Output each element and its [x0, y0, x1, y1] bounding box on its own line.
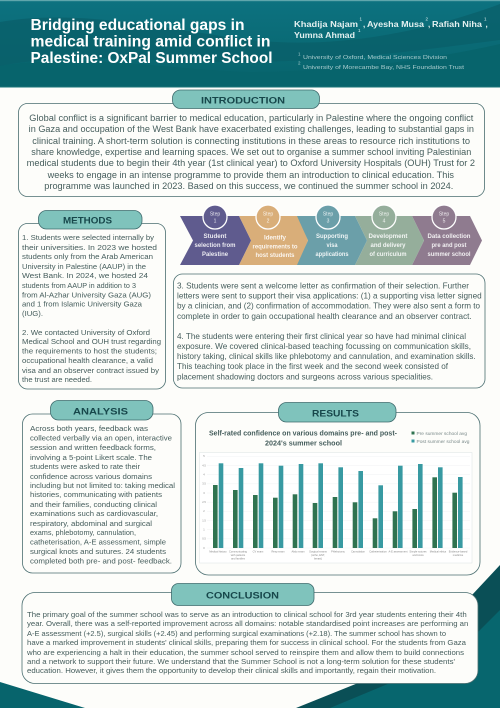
bar chart [200, 452, 472, 563]
authors: 2 [426, 16, 428, 22]
text: analysis body: histories, communicating with patients [30, 490, 162, 499]
affiliations [298, 52, 465, 71]
text: conclusion body: and a network to support their future. We understand that the Summer School is not a long-term solution for these students' [27, 657, 456, 666]
title: Bridging educational gaps in [30, 17, 244, 34]
text: conclusion body: have a marked improvement in students' clinical skills, preparing them for success in clinical school. For the students from Gaza [27, 638, 467, 647]
x axis labels: Abdo exam [291, 550, 305, 554]
step 5 [412, 205, 482, 265]
x axis labels: Simple sutures [409, 550, 427, 554]
x axis labels: Surgical exams [309, 550, 328, 554]
text: methods body: occupational health clearance, a valid [22, 356, 153, 365]
step 3: visa [326, 243, 338, 249]
authors: , [363, 20, 365, 29]
chart legend: Post summer school avg [416, 439, 470, 445]
step 4: and delivery [370, 243, 406, 249]
text: steps 3 and 4: letters were sent to support their visa applications: (1) a supporting visa letter signed [177, 292, 482, 301]
text: introduction body: share knowledge, expertise and learning spaces. We set out to organise a summer school inviting Palestinian [31, 147, 471, 157]
y axis labels: 5 [203, 454, 205, 458]
step 5: Step [439, 212, 449, 218]
text: conclusion body [26, 610, 468, 675]
x axis labels: Medical history [209, 550, 227, 554]
authors: 1 [358, 28, 361, 33]
authors: Yumna Ahmad [294, 31, 355, 40]
y axis labels: 3 [203, 491, 205, 495]
step 5: Data collection [428, 234, 471, 240]
panel: analysis [22, 400, 181, 573]
step 3 [296, 205, 367, 265]
affiliations: 1 [298, 52, 301, 56]
heading: introduction [172, 90, 320, 108]
y axis labels: 2.5 [202, 500, 206, 504]
text: steps 3 and 4: 4. The students were entering their first clinical year so have had minimal clinical [177, 332, 466, 341]
text: methods body: the trust are needed. [22, 375, 92, 384]
pre summer school bars [213, 477, 457, 548]
text: steps 3 and 4: 3. Students were sent a welcome letter as confirmation of their selection. Further [177, 282, 469, 291]
x axis labels: and knots [412, 553, 424, 557]
panel: methods continued [174, 274, 485, 388]
panel: methods [18, 210, 166, 389]
step 2: 2 [267, 218, 270, 224]
step 1 [180, 205, 251, 265]
x axis labels: Cannulation [351, 550, 365, 554]
text: methods body [22, 233, 161, 384]
text: analysis body: Across both years, feedback was [30, 424, 148, 433]
authors: , [428, 20, 430, 29]
text: methods body: University in Palestine (AAUP) in the [22, 262, 146, 271]
text: introduction body: programme was launched in 2023. Based on this success, we continued the summer school in 2024. [44, 181, 453, 191]
x axis labels [209, 550, 468, 560]
step 1: 1 [214, 218, 217, 224]
y axis labels: 3.5 [202, 482, 206, 486]
heading: results: RESULTS [312, 408, 359, 420]
text: steps 3 and 4: history taking, clinical skills like phlebotomy and cannulation, and examination skills. [177, 352, 476, 361]
authors: , [486, 20, 488, 29]
step 1: selection from [194, 243, 236, 249]
text: introduction body: Global conflict is a significant barrier to medical education, particularly in Palestine where the ongoing conflict [29, 113, 474, 123]
text: methods body: 1. Students were selected internally by [22, 233, 154, 242]
y axis labels: 0.5 [202, 537, 206, 541]
step 3: 3 [327, 218, 330, 224]
x axis labels: and families [231, 556, 246, 560]
affiliations: 2 [298, 60, 301, 66]
text: introduction body: weeks to engage in an intense programme to provide them an introduction to clinical education. This [47, 170, 454, 180]
text: analysis body: confidence across various domains [30, 472, 152, 481]
text: analysis body: completed both pre- and post- feedback. [30, 556, 172, 566]
text: introduction body: medical students due to begin their 4th year (1st clinical year) to Oxford University Hospitals (OUH) Trust for 2 [27, 158, 475, 168]
step 4: 4 [383, 218, 386, 224]
step 5: summer school [428, 252, 471, 258]
authors: 1 [360, 16, 362, 22]
y axis labels: 0 [203, 546, 205, 550]
x axis labels: Catheterisation [369, 550, 387, 554]
x axis labels: Resp exam [271, 550, 285, 554]
panel: results [196, 402, 480, 575]
text: steps 3 and 4: This teaching took place in the first week and the second week consisted of [177, 362, 449, 371]
text: methods body: and 1 from Islamic University Gaza [22, 300, 143, 308]
text: introduction body: clinical training. A short-term solution is connecting institutions in these areas to resource rich institutions to [32, 136, 470, 146]
text: analysis body: involving a 5-point Likert scale. The [30, 453, 152, 462]
heading: analysis [50, 400, 153, 420]
step 4 [355, 205, 424, 265]
authors [294, 16, 488, 40]
step 2 [239, 205, 308, 265]
x axis labels: CV exam [253, 550, 263, 554]
x axis labels: medicine [453, 553, 464, 557]
y axis labels: 1 [203, 528, 205, 532]
step 2: Step [263, 212, 273, 218]
y axis labels: 2 [203, 509, 205, 513]
panel: introduction [18, 90, 484, 196]
text: conclusion body: education. However, it gives them the opportunity to develop their clinical skills and importantly, regain their motivation. [27, 666, 436, 675]
x axis labels: Communicating [229, 550, 248, 554]
step 3: Supporting [316, 234, 348, 240]
text: methods body: Medical School and OUH trust regarding [22, 337, 161, 346]
text: methods body: the requirements to host the students; [22, 346, 157, 356]
chart title: 2024's summer school [265, 438, 342, 448]
affiliations: University of Morecambe Bay, NHS Foundation Trust [303, 65, 465, 71]
heading: results [278, 402, 396, 422]
corner shape: bottom right [296, 565, 500, 708]
heading: methods [38, 210, 142, 229]
text: analysis body: exams, phlebotomy, cannulation, [30, 528, 136, 537]
x axis labels: Evidence-based [449, 550, 468, 554]
x axis labels: with patients [231, 553, 246, 557]
title: Palestine: OxPal Summer School [30, 50, 272, 67]
step 2: Identify [264, 236, 287, 242]
x axis labels: A-E assessment [389, 550, 408, 554]
text: conclusion body: year. Overall, there was a self-reported improvement across all domains: notable standardised point increases are performing an [27, 619, 468, 628]
x axis labels: (ortho, ENT, [311, 553, 325, 557]
text: conclusion body: A-E assessment (+2.5), surgical skills (+2.45) and performing surgical examinations (+2.18). The summer school has shown to [27, 629, 446, 638]
step 3: applications [316, 252, 349, 258]
text: analysis body: students were asked to rate their [30, 462, 140, 471]
text: analysis body: catheterisation, A-E assessment, simple [30, 538, 166, 546]
title: medical training amid conflict in [30, 34, 270, 50]
authors: 1 [484, 16, 487, 22]
y axis labels: 4.5 [202, 463, 206, 467]
step 2: host students [256, 253, 295, 259]
title [30, 17, 272, 67]
heading: introduction: INTRODUCTION [201, 96, 285, 107]
text: methods body: students from AAUP in addition to 3 [22, 281, 136, 290]
x axis labels: Medical ethics [430, 550, 447, 554]
process chevrons [180, 205, 482, 265]
authors: Ayesha Musa [367, 20, 425, 29]
header banner [0, 0, 500, 88]
text: analysis body: respiratory, abdominal and surgical [30, 519, 152, 528]
chart title [209, 428, 398, 448]
text: analysis body [30, 424, 175, 566]
chart legend [412, 431, 470, 445]
text: analysis body: examinations such as cardiovascular, [30, 509, 158, 518]
corner shape: bottom left [0, 682, 85, 708]
y axis labels: 1.5 [202, 518, 206, 522]
text: analysis body: and their families, conducting clinical [30, 500, 157, 509]
chart legend: Pre summer school avg [416, 431, 467, 437]
step 5: 5 [443, 218, 446, 224]
heading: conclusion [172, 584, 314, 606]
text: methods body: students only from the Arab American [22, 252, 153, 261]
text: analysis body: session and written feedback forms, [30, 443, 156, 452]
heading: analysis: ANALYSIS [73, 406, 128, 418]
step 4: Step [379, 212, 389, 218]
text: analysis body: collected verbally via an open, interactive [30, 434, 172, 442]
x axis labels: breast) [314, 556, 322, 560]
text: methods body: West Bank. In 2024, we hosted 24 [22, 271, 149, 280]
text: conclusion body: The primary goal of the summer school was to serve as an introduction to clinical school for 3rd year students entering their 4th [27, 610, 467, 619]
post summer school bars [219, 463, 463, 548]
step 4: of curriculum [370, 252, 406, 258]
text: steps 3 and 4: by a clinician, and (2) confirmation of accommodation. They were also sent a form to [177, 302, 480, 311]
step 1: Student [204, 234, 226, 240]
step 2: requirements to [252, 244, 298, 250]
text: steps 3 and 4 [177, 282, 482, 381]
step 3: Step [323, 212, 333, 218]
panel: conclusion [22, 584, 478, 684]
step 1: Palestine [202, 252, 229, 258]
text: introduction body: in Gaza and occupation of the West Bank have exacerbated existing challenges, leading to substantial gaps in [29, 124, 474, 134]
chart title: Self-rated confidence on various domains pre- and post- [209, 428, 398, 438]
heading: methods: METHODS [63, 216, 112, 227]
text: analysis body: including but not limited to: taking medical [30, 481, 175, 490]
text: introduction body [27, 113, 475, 191]
y axis labels: 4 [203, 472, 205, 476]
step 4: Development [368, 234, 408, 240]
text: steps 3 and 4: complete in order to gain occupational health clearance and an observer contract. [177, 312, 472, 321]
step 5: pre and post [432, 243, 466, 249]
step 1: Step [210, 212, 220, 218]
text: analysis body: surgical knots and sutures. 24 students [30, 547, 166, 556]
text: methods body: (IUG). [22, 309, 43, 318]
text: methods body: 2. We contacted University of Oxford [22, 328, 150, 337]
heading: conclusion: CONCLUSION [206, 590, 279, 602]
text: steps 3 and 4: placement shadowing doctors and surgeons across various specialities. [177, 372, 433, 381]
affiliations: University of Oxford, Medical Sciences Division [303, 55, 447, 61]
text: steps 3 and 4: exposure. We covered clinical-based teaching focussing on communication skills, [177, 342, 471, 351]
authors: Khadija Najam [294, 20, 358, 29]
y axis labels [202, 454, 206, 550]
text: conclusion body: who are experiencing a halt in their education, the summer school served to reinspire them and allow them to build connections [26, 648, 464, 657]
text: methods body: from Al-Azhar University Gaza (AUG) [22, 290, 151, 300]
text: methods body: visa and an observer contract issued by [22, 366, 159, 375]
authors: Rafiah Niha [432, 20, 483, 29]
x axis labels: Phlebotomy [331, 550, 346, 554]
text: methods body: their universities. In 2023 we hosted [22, 243, 157, 252]
